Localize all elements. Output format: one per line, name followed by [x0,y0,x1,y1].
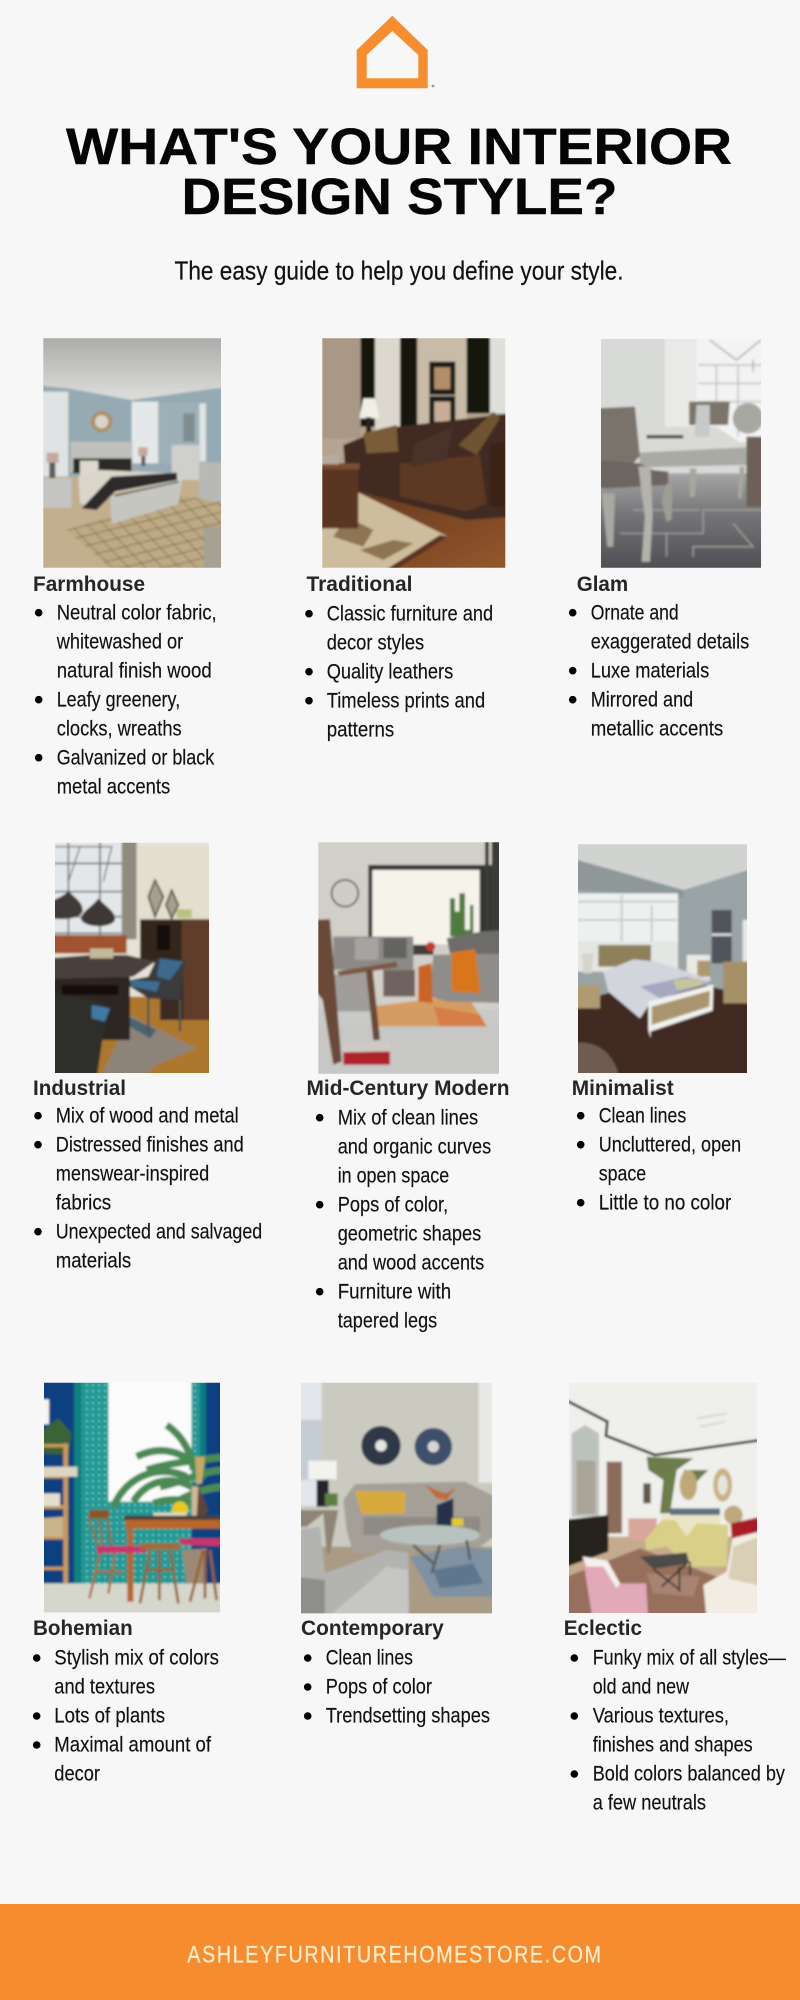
bullet list [33,1645,219,1785]
panel: contemporary [291,1373,502,1727]
bullet list [316,1105,491,1332]
bullet list: Pops of color, [338,1192,448,1216]
heading: Traditional [306,572,412,596]
panel: farmhouse [33,330,231,798]
photo: glam dining room [601,339,761,568]
bullet list: tapered legs [338,1308,437,1332]
photo: farmhouse bedroom [43,338,221,568]
bullet list: Luxe materials [591,658,709,682]
heading: Industrial [33,1076,126,1100]
bullet list: and wood accents [338,1250,484,1274]
bullet list: metal accents [57,774,170,798]
bullet list: Classic furniture and [327,601,493,625]
photo: mid-century living room [318,842,499,1074]
photo: industrial dining room [55,842,209,1073]
bullet list: materials [56,1248,131,1272]
bullet list: Mix of clean lines [338,1105,478,1129]
bullet list: in open space [338,1163,449,1187]
bullet list: natural finish wood [57,658,212,682]
photo: minimalist bedroom [578,844,747,1073]
heading: Eclectic [564,1616,642,1640]
bullet list: whitewashed or [56,629,183,653]
bullet list [577,1103,741,1214]
bullet list: Leafy greenery, [57,687,180,711]
panel: traditional [305,330,515,741]
bullet list: Trendsetting shapes [326,1703,490,1727]
photo: traditional living room [322,338,506,568]
bullet list: Stylish mix of colors [54,1645,219,1669]
bullet list: exaggerated details [591,629,749,653]
bullet list: Furniture with [338,1279,451,1303]
bullet list: a few neutrals [593,1790,706,1814]
bullet list: old and new [593,1674,689,1698]
bullet list: Quality leathers [327,659,453,683]
bullet list: Little to no color [599,1190,731,1214]
bullet list: clocks, wreaths [57,716,182,740]
bullet list: Pops of color [326,1674,432,1698]
bullet list: space [599,1161,646,1185]
heading: Mid-Century Modern [306,1076,510,1100]
panel: industrial [33,833,262,1272]
bullet list: Unexpected and salvaged [56,1219,262,1243]
bullet list: and organic curves [338,1134,491,1158]
bullet list [35,600,217,798]
bullet list: Mirrored and [591,687,693,711]
bullet list: Neutral color fabric, [57,600,217,624]
bullet list [570,1645,786,1814]
title [66,118,732,225]
icon: orange house logo [357,16,434,88]
bullet list [305,601,493,741]
panel: eclectic [559,1373,786,1814]
bullet list: and textures [54,1674,155,1698]
bullet list: Distressed finishes and [56,1132,244,1156]
photo: eclectic living room [569,1383,757,1613]
title: WHAT'S YOUR INTERIOR [66,118,732,175]
bullet list: Ornate and [591,600,679,624]
bullet list: Clean lines [599,1103,686,1127]
footer band [0,1904,800,2000]
bullet list: menswear-inspired [56,1161,209,1185]
heading: Bohemian [33,1616,133,1640]
bullet list: metallic accents [591,716,723,740]
bullet list: decor [54,1761,100,1785]
bullet list: Lots of plants [54,1703,165,1727]
heading: Contemporary [301,1616,444,1640]
heading: Glam [577,572,628,596]
title: DESIGN STYLE? [182,168,618,225]
bullet list: decor styles [327,630,424,654]
bullet list: finishes and shapes [593,1732,753,1756]
photo: bohemian dining room [44,1382,220,1612]
bullet list: Maximal amount of [54,1732,211,1756]
subtitle: The easy guide to help you define your style. [174,255,624,285]
bullet list: Various textures, [593,1703,729,1727]
panel: mid-century modern [306,833,510,1332]
bullet list: Galvanized or black [57,745,214,769]
bullet list [569,600,749,740]
bullet list: fabrics [56,1190,111,1214]
bullet list [304,1645,490,1727]
panel: bohemian [33,1373,230,1785]
bullet list: patterns [327,717,394,741]
heading: Farmhouse [33,572,145,596]
photo: contemporary living room [301,1382,492,1614]
bullet list: geometric shapes [338,1221,481,1245]
footer website text: ASHLEYFURNITUREHOMESTORE.COM [187,1941,603,1968]
bullet list: Uncluttered, open [599,1132,741,1156]
bullet list: Timeless prints and [327,688,485,712]
bullet list: Clean lines [326,1645,413,1669]
panel: glam [569,330,771,740]
heading: Minimalist [572,1076,674,1100]
bullet list [34,1103,262,1272]
bullet list: Mix of wood and metal [56,1103,239,1127]
panel: minimalist [568,835,757,1214]
